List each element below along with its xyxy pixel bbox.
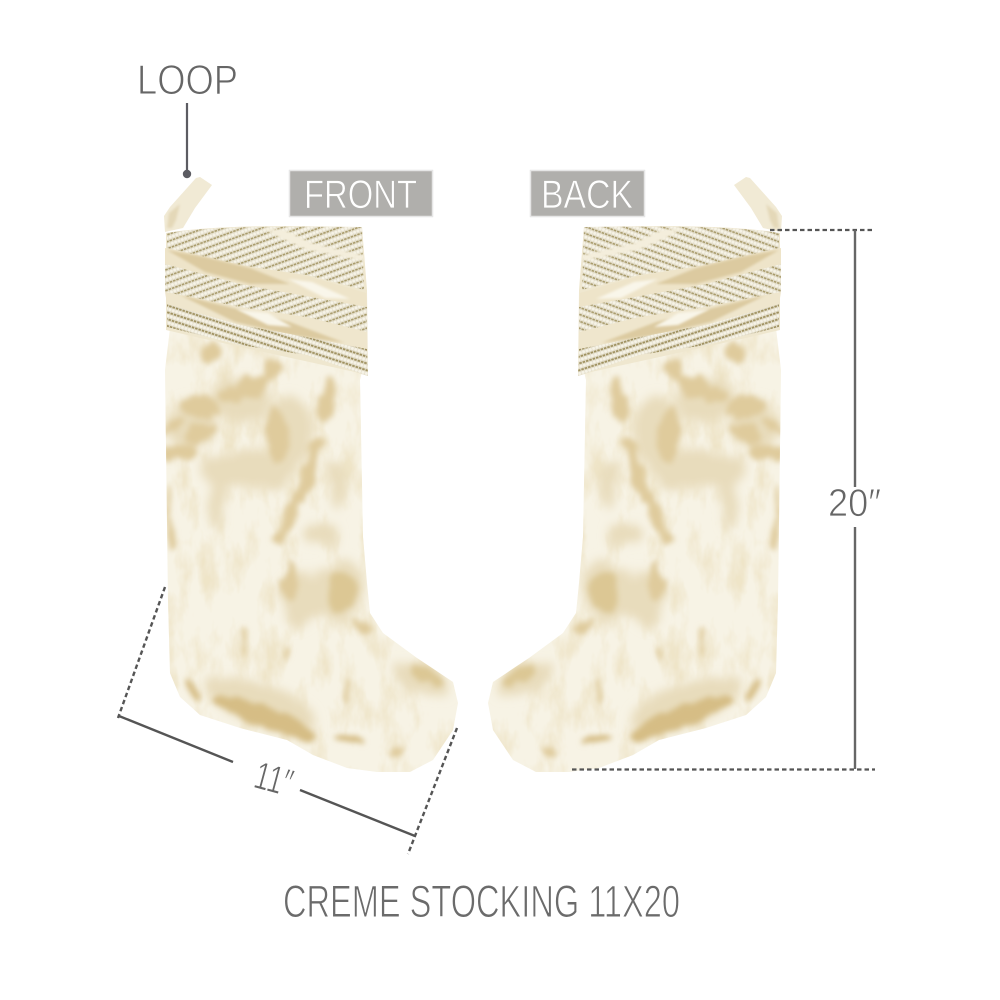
front badge: FRONT — [304, 173, 417, 217]
product title: CREME STOCKING 11X20 — [283, 876, 680, 927]
loop pointer — [183, 103, 191, 178]
width dimension: 11 inches: 11″ — [250, 754, 298, 806]
back stocking — [481, 177, 788, 775]
loop label: LOOP — [137, 56, 238, 103]
back badge: BACK — [541, 173, 633, 217]
width dimension: 11 inches — [118, 587, 457, 854]
height dimension: 20 inches: 20″ — [828, 482, 881, 525]
infographic canvas — [116, 65, 880, 917]
front stocking — [158, 177, 465, 775]
